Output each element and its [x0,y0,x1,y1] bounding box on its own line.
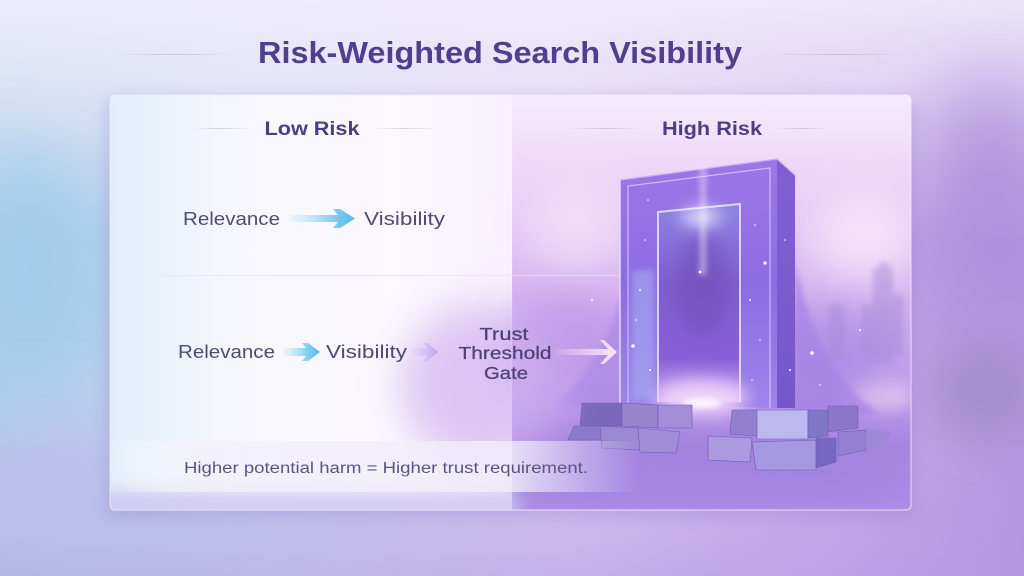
energy veil [790,260,880,415]
heading: low risk: Low Risk [264,119,360,140]
arrow: visibility to gate [411,343,438,361]
arrow: relevance to visibility [283,343,320,361]
panel: low risk column [110,95,512,510]
face shadow [679,234,725,334]
arrow: into gate [556,340,617,364]
reflective ground [510,492,512,496]
panel: high risk column with gate illustration [505,95,920,510]
main comparison panel [90,95,920,520]
gate inner door [658,204,740,402]
gate side [777,159,795,408]
title: Risk-Weighted Search Visibility [258,35,743,70]
high risk flow [178,324,617,383]
arrow: relevance to visibility [289,209,355,228]
row divider [160,275,620,276]
high risk flow: Visibility [326,342,407,362]
low risk flow: Visibility [364,209,445,229]
title rules [112,54,910,55]
heading: high risk: High Risk [662,119,762,140]
label: trust threshold gate: Threshold [458,343,552,363]
label: trust threshold gate: Gate [484,363,528,383]
clouds and haze [500,190,910,469]
wash of purple bleeding into the low risk column [400,305,560,465]
callout: Higher potential harm = Higher trust requirement. [184,460,588,477]
panel border [110,95,911,510]
panel shadow [106,98,914,518]
low risk flow [183,209,445,229]
stone blocks at gate base [568,403,890,470]
label: trust threshold gate [458,324,552,383]
distant city [830,262,903,363]
gate sparkles [591,199,861,386]
label: trust threshold gate: Trust [480,324,529,344]
icon: trust threshold gate [620,159,795,416]
light beams [700,165,706,275]
callout [110,441,640,492]
divider between columns [512,261,513,493]
gate front [620,159,777,408]
high risk flow: Relevance [178,342,275,362]
low risk flow: Relevance [183,209,280,229]
